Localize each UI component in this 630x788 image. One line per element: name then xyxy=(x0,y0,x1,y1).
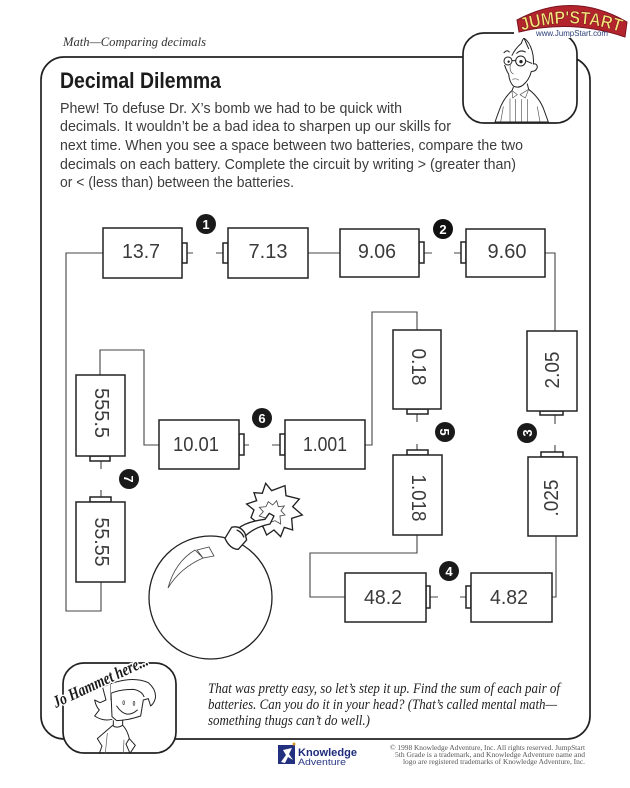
professor figure xyxy=(495,38,548,122)
number badge 4 xyxy=(439,561,459,581)
bonus challenge text: That was pretty easy, so let’s step it up. Find the sum of each pair of xyxy=(208,681,562,697)
copyright notice xyxy=(390,744,586,766)
panel: Jo Hammet portrait xyxy=(49,651,176,753)
battery: 9.06 xyxy=(340,229,424,277)
battery: 1.001 xyxy=(280,420,365,469)
circuit wires xyxy=(66,253,556,611)
battery: 13.7: 13.7 xyxy=(122,241,160,263)
copyright notice: 5th Grade is a trademark, and Knowledge Adventure name and xyxy=(395,751,586,759)
instructions text xyxy=(60,100,523,191)
bomb fuse and spark xyxy=(225,483,302,549)
battery: 1.018 xyxy=(393,450,442,535)
instructions text: next time. When you see a space between two batteries, compare the two xyxy=(60,137,523,154)
battery: 0.18 xyxy=(393,330,441,414)
number badge 4: 4 xyxy=(445,564,453,579)
battery: 4.82 xyxy=(466,573,552,622)
Jo Hammet script label: Jo Hammet here... xyxy=(49,651,151,712)
logo subname: Adventure xyxy=(298,757,346,767)
battery: 55.55: 55.55 xyxy=(90,518,112,566)
logo: Knowledge Adventure xyxy=(278,742,357,767)
battery: 555.5: 555.5 xyxy=(90,388,112,438)
battery: 2.05: 2.05 xyxy=(542,352,564,388)
title: Decimal Dilemma xyxy=(60,68,222,93)
number badge 5 xyxy=(435,422,455,442)
battery: .025 xyxy=(528,452,577,536)
battery: 555.5 xyxy=(76,375,125,461)
battery: 48.2 xyxy=(345,573,430,622)
battery: 4.82: 4.82 xyxy=(490,587,528,609)
number badge 2 xyxy=(433,219,453,239)
bonus challenge text: something thugs can’t do well.) xyxy=(208,713,370,729)
battery: 7.13: 7.13 xyxy=(248,241,288,263)
number badge 6: 6 xyxy=(258,411,266,426)
battery: 7.13 xyxy=(223,228,308,278)
battery: 1.001: 1.001 xyxy=(303,434,347,456)
Jo Hammet figure xyxy=(95,679,156,753)
subject header: Math—Comparing decimals xyxy=(62,34,206,49)
battery: 13.7 xyxy=(103,228,187,278)
number badge 7: 7 xyxy=(121,475,136,483)
logo: JumpStart banner xyxy=(514,5,628,38)
logo name: Knowledge xyxy=(298,747,357,759)
number badge 7 xyxy=(119,469,139,489)
battery: 2.05 xyxy=(527,331,577,415)
number badge 6 xyxy=(252,408,272,428)
battery: .025: .025 xyxy=(541,480,563,516)
logo icon xyxy=(278,742,296,764)
copyright notice: © 1998 Knowledge Adventure, Inc. All rights reserved. JumpStart xyxy=(390,744,585,752)
number badge 3: 3 xyxy=(520,429,535,437)
number badge 2: 2 xyxy=(439,222,447,237)
battery: 10.01 xyxy=(159,420,244,469)
battery: 48.2: 48.2 xyxy=(364,587,402,609)
battery: 9.06: 9.06 xyxy=(358,241,396,263)
logo url: www.JumpStart.com xyxy=(535,28,608,38)
number badge 5: 5 xyxy=(437,428,452,436)
battery: 55.55 xyxy=(76,497,125,582)
icon: bomb xyxy=(149,483,302,659)
bonus challenge text: batteries. Can you do it in your head? (That’s called mental math— xyxy=(208,697,557,713)
logo wordmark: JUMP'START xyxy=(521,10,624,32)
battery: 0.18: 0.18 xyxy=(407,348,429,386)
bonus challenge text xyxy=(208,681,562,729)
bomb highlight xyxy=(168,547,214,588)
instructions text: Phew! To defuse Dr. X’s bomb we had to be quick with xyxy=(60,100,402,117)
instructions text: decimals. It wouldn’t be a bad idea to sharpen up our skills for xyxy=(60,118,451,135)
copyright notice: logo are registered trademarks of Knowledge Adventure, Inc. xyxy=(403,758,585,766)
battery: 9.60: 9.60 xyxy=(488,241,526,263)
panel: professor portrait xyxy=(463,33,577,123)
number badge 1 xyxy=(196,214,216,234)
number badge 1: 1 xyxy=(202,217,210,232)
instructions text: or < (less than) between the batteries. xyxy=(60,174,294,191)
number badge 3 xyxy=(517,423,537,443)
battery: 9.60 xyxy=(461,229,545,277)
main worksheet panel xyxy=(41,57,590,739)
battery: 10.01: 10.01 xyxy=(173,434,219,456)
battery: 1.018: 1.018 xyxy=(407,474,429,522)
instructions text: decimals on each battery. Complete the circuit by writing > (greater than) xyxy=(60,156,516,173)
